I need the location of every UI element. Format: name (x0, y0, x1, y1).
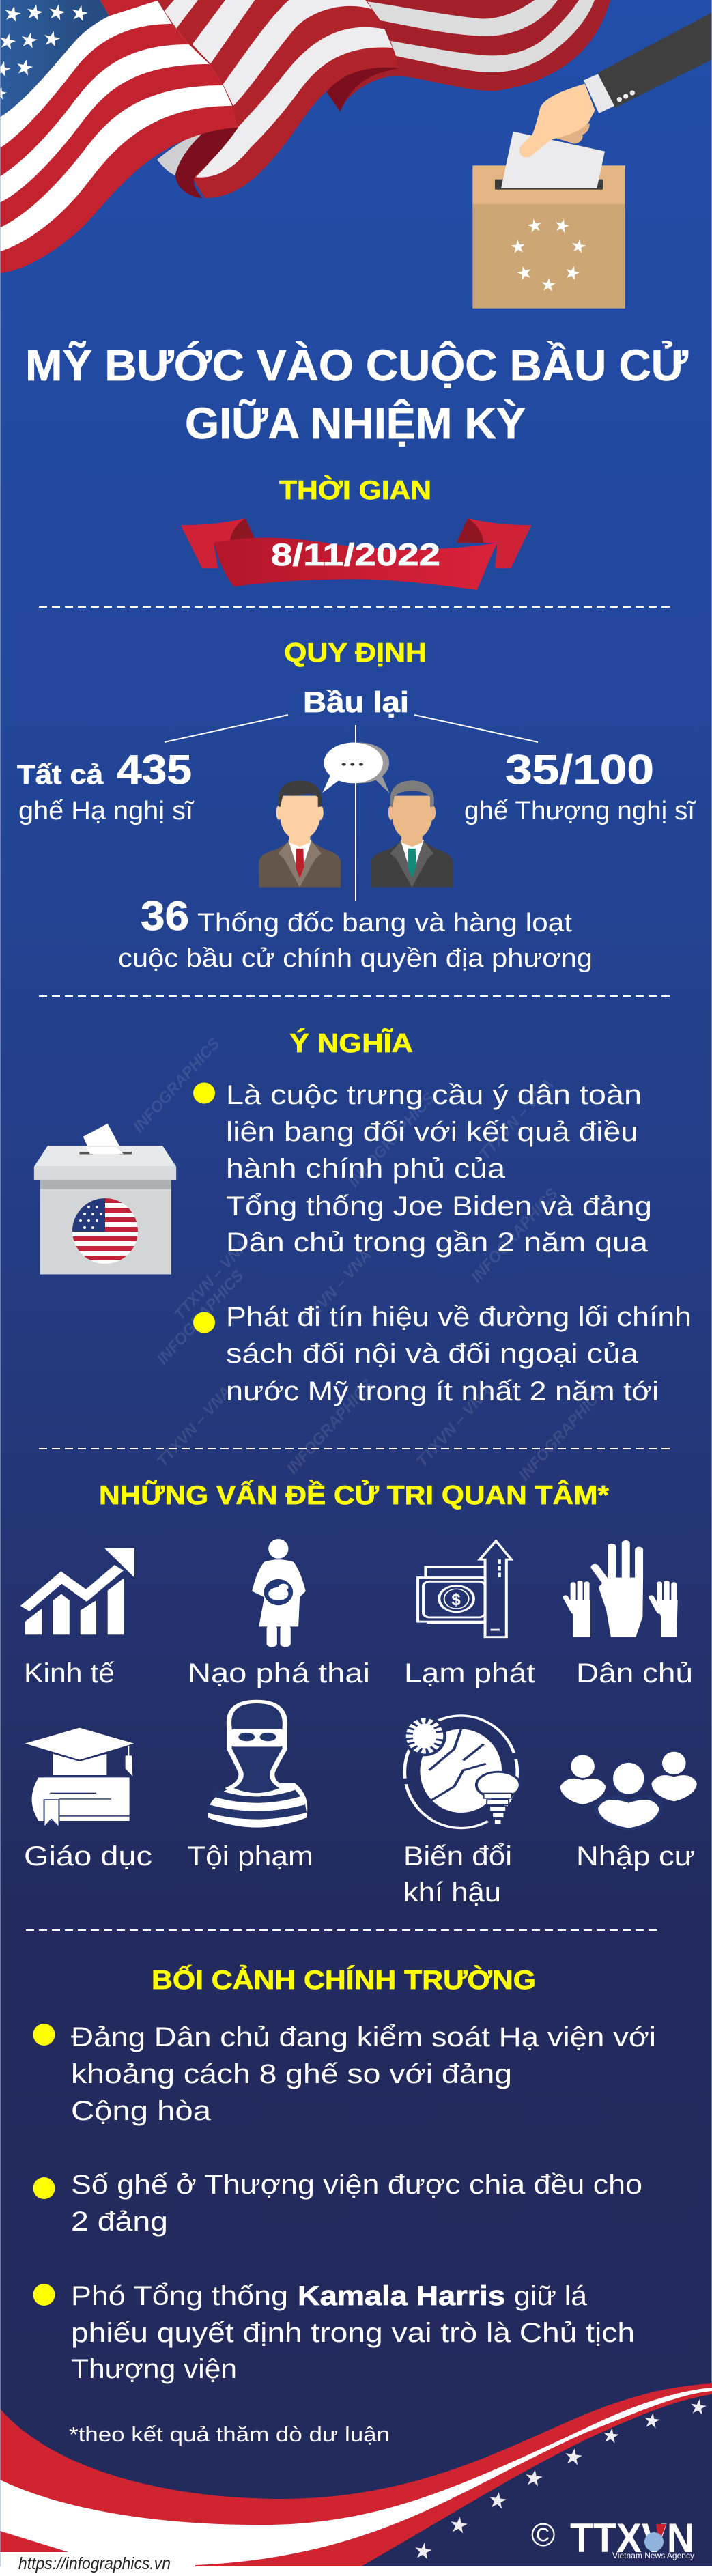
list: ý nghĩa bullet 1: Dân chủ trong gần 2 năm qua (226, 1228, 649, 1258)
list: bối cảnh bullet 1: khoảng cách 8 ghế so với đảng (71, 2059, 512, 2089)
heading: những vấn đề cử tri quan tâm: NHỮNG VẤN ĐỀ CỬ TRI QUAN TÂM* (99, 1480, 610, 1510)
icon: pregnant woman (252, 1539, 306, 1647)
icon: raised hands (565, 1543, 678, 1637)
label: lạm phát: Lạm phát (404, 1658, 535, 1688)
stat: 35/100 senate seats: ghế Thượng nghị sĩ (464, 797, 696, 825)
list: bối cảnh bullet 1 (33, 2022, 656, 2126)
list: ý nghĩa bullet 1 (193, 1080, 652, 1258)
stat: 435 house seats: ghế Hạ nghị sĩ (18, 797, 194, 825)
ribbon with date (181, 518, 531, 590)
source url (0, 2552, 195, 2576)
watermarks: INFOGRAPHICS (344, 1088, 438, 1190)
title: GIỮA NHIỆM KỲ (185, 398, 526, 448)
watermarks: TTXVN – VNA (412, 1383, 494, 1470)
list: bối cảnh bullet 3: Phó Tổng thống (71, 2281, 288, 2311)
logo: TTXVN: © (531, 2517, 555, 2553)
list: ý nghĩa bullet 1: Là cuộc trưng cầu ý dân toàn (226, 1080, 642, 1110)
list: ý nghĩa bullet 1: hành chính phủ của (226, 1154, 506, 1184)
stat: 36 governors: 36 (141, 893, 189, 939)
source url: https://infographics.vn (18, 2554, 171, 2573)
watermarks: TTXVN – VNA (170, 1236, 252, 1323)
list: bối cảnh bullet 3: giữ lá (514, 2281, 588, 2311)
list: bối cảnh bullet 2: 2 đảng (71, 2207, 168, 2237)
label: biến đổi khí hậu (403, 1841, 512, 1908)
list: bối cảnh bullet 2 (33, 2170, 642, 2237)
list: ý nghĩa bullet 1: Tổng thống Joe Biden và đảng (226, 1191, 652, 1221)
stat: 35/100 senate seats (464, 747, 696, 825)
label: kinh tế: Kinh tế (24, 1658, 115, 1688)
label: nạo phá thai: Nạo phá thai (188, 1658, 370, 1688)
label: biến đổi khí hậu: khí hậu (403, 1878, 501, 1908)
watermarks: INFOGRAPHICS (153, 1266, 247, 1368)
footer white strip (0, 2566, 712, 2576)
stat: 435 house seats (17, 747, 194, 825)
label: bầu lại: Bầu lại (303, 686, 409, 719)
heading: ý nghĩa: Ý NGHĨA (289, 1028, 413, 1058)
icon: inflation money and arrow (418, 1541, 511, 1637)
list: bối cảnh bullet 1: Cộng hòa (71, 2096, 212, 2126)
list: bối cảnh bullet 3 (33, 2281, 635, 2384)
watermarks: TTXVN – VNA (293, 1246, 375, 1333)
stat: 35/100 senate seats: 35/100 (505, 747, 654, 793)
watermarks: INFOGRAPHICS (515, 1382, 609, 1484)
watermarks: INFOGRAPHICS (467, 1184, 561, 1286)
icon: group of people (560, 1752, 697, 1830)
label: tội phạm: Tội phạm (187, 1841, 313, 1871)
footer swoosh: red and white stripes (0, 2383, 712, 2566)
stat: 36 governors: Thống đốc bang và hàng loạt (197, 909, 572, 937)
watermarks: TTXVN – VNA (153, 1383, 235, 1470)
list: ý nghĩa bullet 2 (193, 1302, 692, 1406)
flag far section (328, 0, 610, 111)
heading: quy định: QUY ĐỊNH (284, 638, 427, 668)
flag curl (157, 128, 238, 198)
flag: American flag waving across the top (0, 0, 610, 273)
watermarks: INFOGRAPHICS (283, 1375, 377, 1477)
label: giáo dục: Giáo dục (24, 1841, 152, 1871)
watermarks: TTXVN – VNA (475, 1075, 557, 1163)
title (25, 340, 689, 448)
icon: climate change globe (403, 1716, 520, 1828)
stat: 435 house seats: Tất cả (17, 760, 104, 790)
icon: economy chart (25, 1548, 134, 1634)
icon: masked criminal (207, 1701, 307, 1828)
heading: bối cảnh chính trường: BỐI CẢNH CHÍNH TRƯỜNG (152, 1964, 536, 1995)
list: ý nghĩa bullet 2: nước Mỹ trong ít nhất 2 năm tới (226, 1376, 659, 1406)
watermarks: INFOGRAPHICS (129, 1034, 223, 1135)
list: bối cảnh bullet 3: Kamala Harris (298, 2281, 505, 2311)
logo: TTXVN: Vietnam News Agency (612, 2551, 694, 2560)
flag middle section (157, 0, 399, 198)
connector lines (165, 715, 538, 901)
ribbon with date: 8/11/2022 (271, 537, 440, 572)
icon: hand casting a ballot into a box (472, 12, 712, 309)
label: biến đổi khí hậu: Biến đổi (403, 1841, 512, 1871)
watermarks (129, 1034, 609, 1484)
heading: thời gian: THỜI GIAN (279, 475, 431, 505)
footer stars (414, 2398, 707, 2560)
list: ý nghĩa bullet 2: sách đối nội và đối ngoại của (226, 1339, 639, 1369)
stat: 36 governors (118, 893, 593, 973)
list: bối cảnh bullet 3: phiếu quyết định trong vai trò là Chủ tịch (71, 2318, 635, 2348)
stat: 435 house seats: 435 (117, 747, 192, 793)
list: bối cảnh bullet 1: Đảng Dân chủ đang kiểm soát Hạ viện với (71, 2022, 656, 2052)
label: nhập cư: Nhập cư (576, 1841, 695, 1871)
title: MỸ BƯỚC VÀO CUỘC BẦU CỬ (25, 340, 689, 390)
icon: graduation cap on book (25, 1728, 134, 1828)
list: bối cảnh bullet 3: Thượng viện (71, 2354, 237, 2384)
list: bối cảnh bullet 2: Số ghế ở Thượng viện được chia đều cho (71, 2170, 642, 2200)
icon: inflation dollar sign: $ (451, 1591, 461, 1609)
flag front section (0, 0, 238, 273)
icon: grey ballot box with US flag (34, 1124, 176, 1274)
footnote: *theo kết quả thăm dò dư luận (69, 2422, 390, 2446)
label: dân chủ: Dân chủ (576, 1658, 693, 1688)
logo: TTXVN: TTXVN (570, 2515, 694, 2561)
list: ý nghĩa bullet 1: liên bang đối với kết quả điều (226, 1117, 638, 1147)
stat: 36 governors: cuộc bầu cử chính quyền địa phương (118, 944, 593, 973)
icon: two men talking (259, 742, 453, 888)
list: ý nghĩa bullet 2: Phát đi tín hiệu về đường lối chính (226, 1302, 692, 1332)
